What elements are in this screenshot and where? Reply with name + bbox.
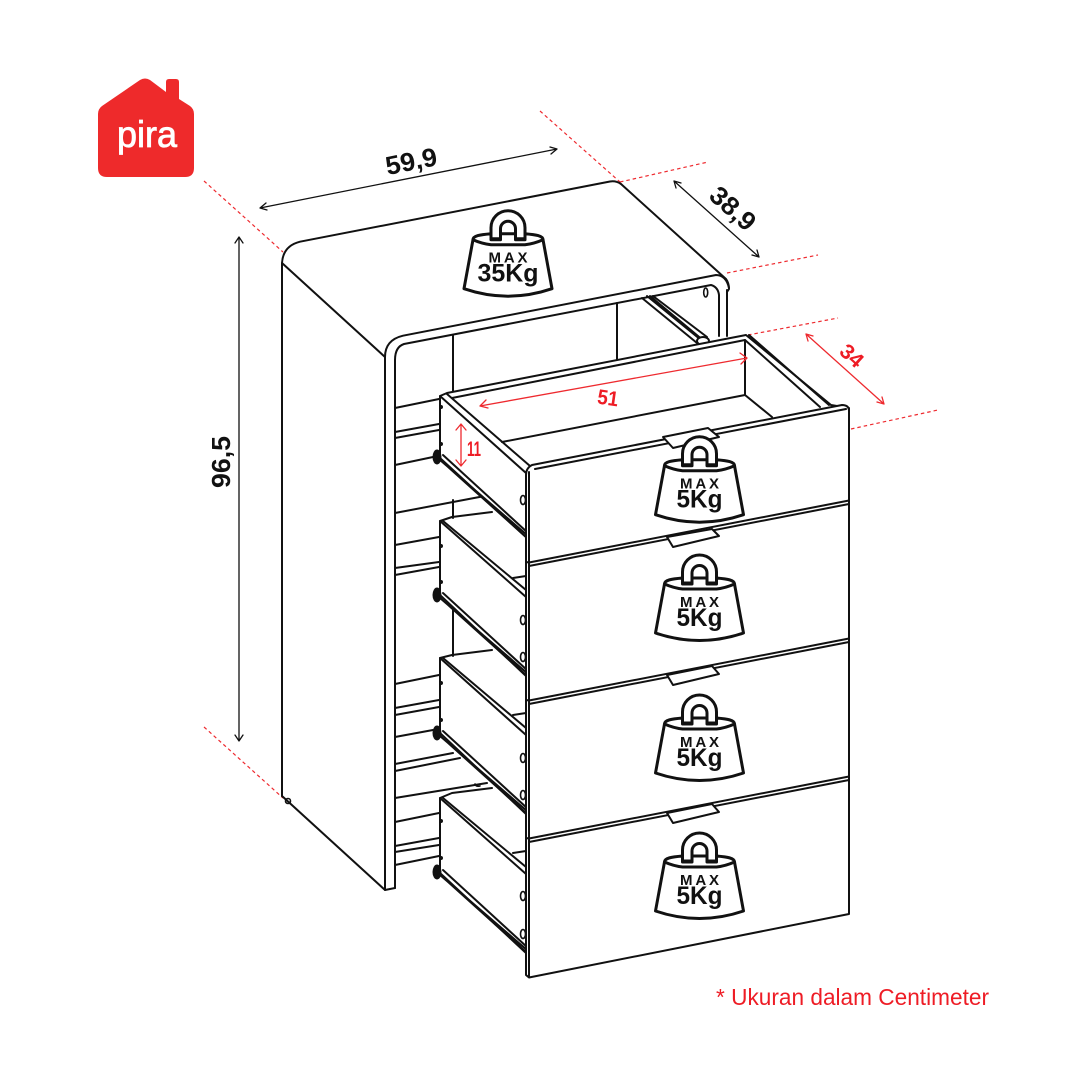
dimension: drawer depth 34: 34 [835,340,868,373]
dimension: drawer width 51 [480,353,747,411]
weight icon: drawer 1 max 5 kg [656,437,744,522]
weight icon: drawer 1 max 5 kg: 5Kg [676,486,722,514]
drawer 1 open with interior [432,335,849,565]
weight icon: drawer 3 max 5 kg [656,695,744,780]
dimension: drawer height 11: 11 [467,438,481,461]
weight icon: drawer 2 max 5 kg: 5Kg [676,604,722,632]
logo: pira house [98,78,194,177]
weight icon: drawer 4 max 5 kg: 5Kg [676,882,722,910]
drawer handles [663,428,719,823]
footnote: * Ukuran dalam Centimeter [716,984,989,1010]
dimension: drawer depth 34 [806,334,884,404]
dimension: width 59,9: 59,9 [383,141,440,181]
weight icon: max 35 kg: 35Kg [478,260,538,288]
dimension: height 96,5: 96,5 [206,436,236,488]
weight icon: drawer 4 max 5 kg: MAX [680,872,719,889]
drawer 3 open side [432,650,527,814]
drawer fronts [526,405,849,978]
weight icon: max 35 kg: MAX [488,250,528,267]
drawer 2 open side [432,512,527,676]
drawer 4 open side [432,788,527,953]
dimension: height 96,5 [206,237,243,741]
dimension: depth 38,9: 38,9 [704,180,762,237]
weight icon: drawer 4 max 5 kg [656,833,744,918]
weight icon: drawer 1 max 5 kg: MAX [680,476,719,493]
weight icon: drawer 3 max 5 kg: MAX [680,734,719,751]
dimension: drawer width 51: 51 [596,386,620,411]
logo: pira house: pira [117,114,177,155]
dimension: drawer height 11 [456,424,481,466]
weight icon: max 35 kg [464,211,552,296]
red dashed guide lines [204,111,938,798]
cabinet interior rails and panels [395,296,709,865]
dimension: depth 38,9 [674,180,762,257]
weight icon: drawer 3 max 5 kg: 5Kg [676,744,722,772]
weight icon: drawer 2 max 5 kg: MAX [680,594,719,611]
cabinet body [282,181,729,890]
weight icon: drawer 2 max 5 kg [656,555,744,640]
dimension: width 59,9 [260,141,557,210]
